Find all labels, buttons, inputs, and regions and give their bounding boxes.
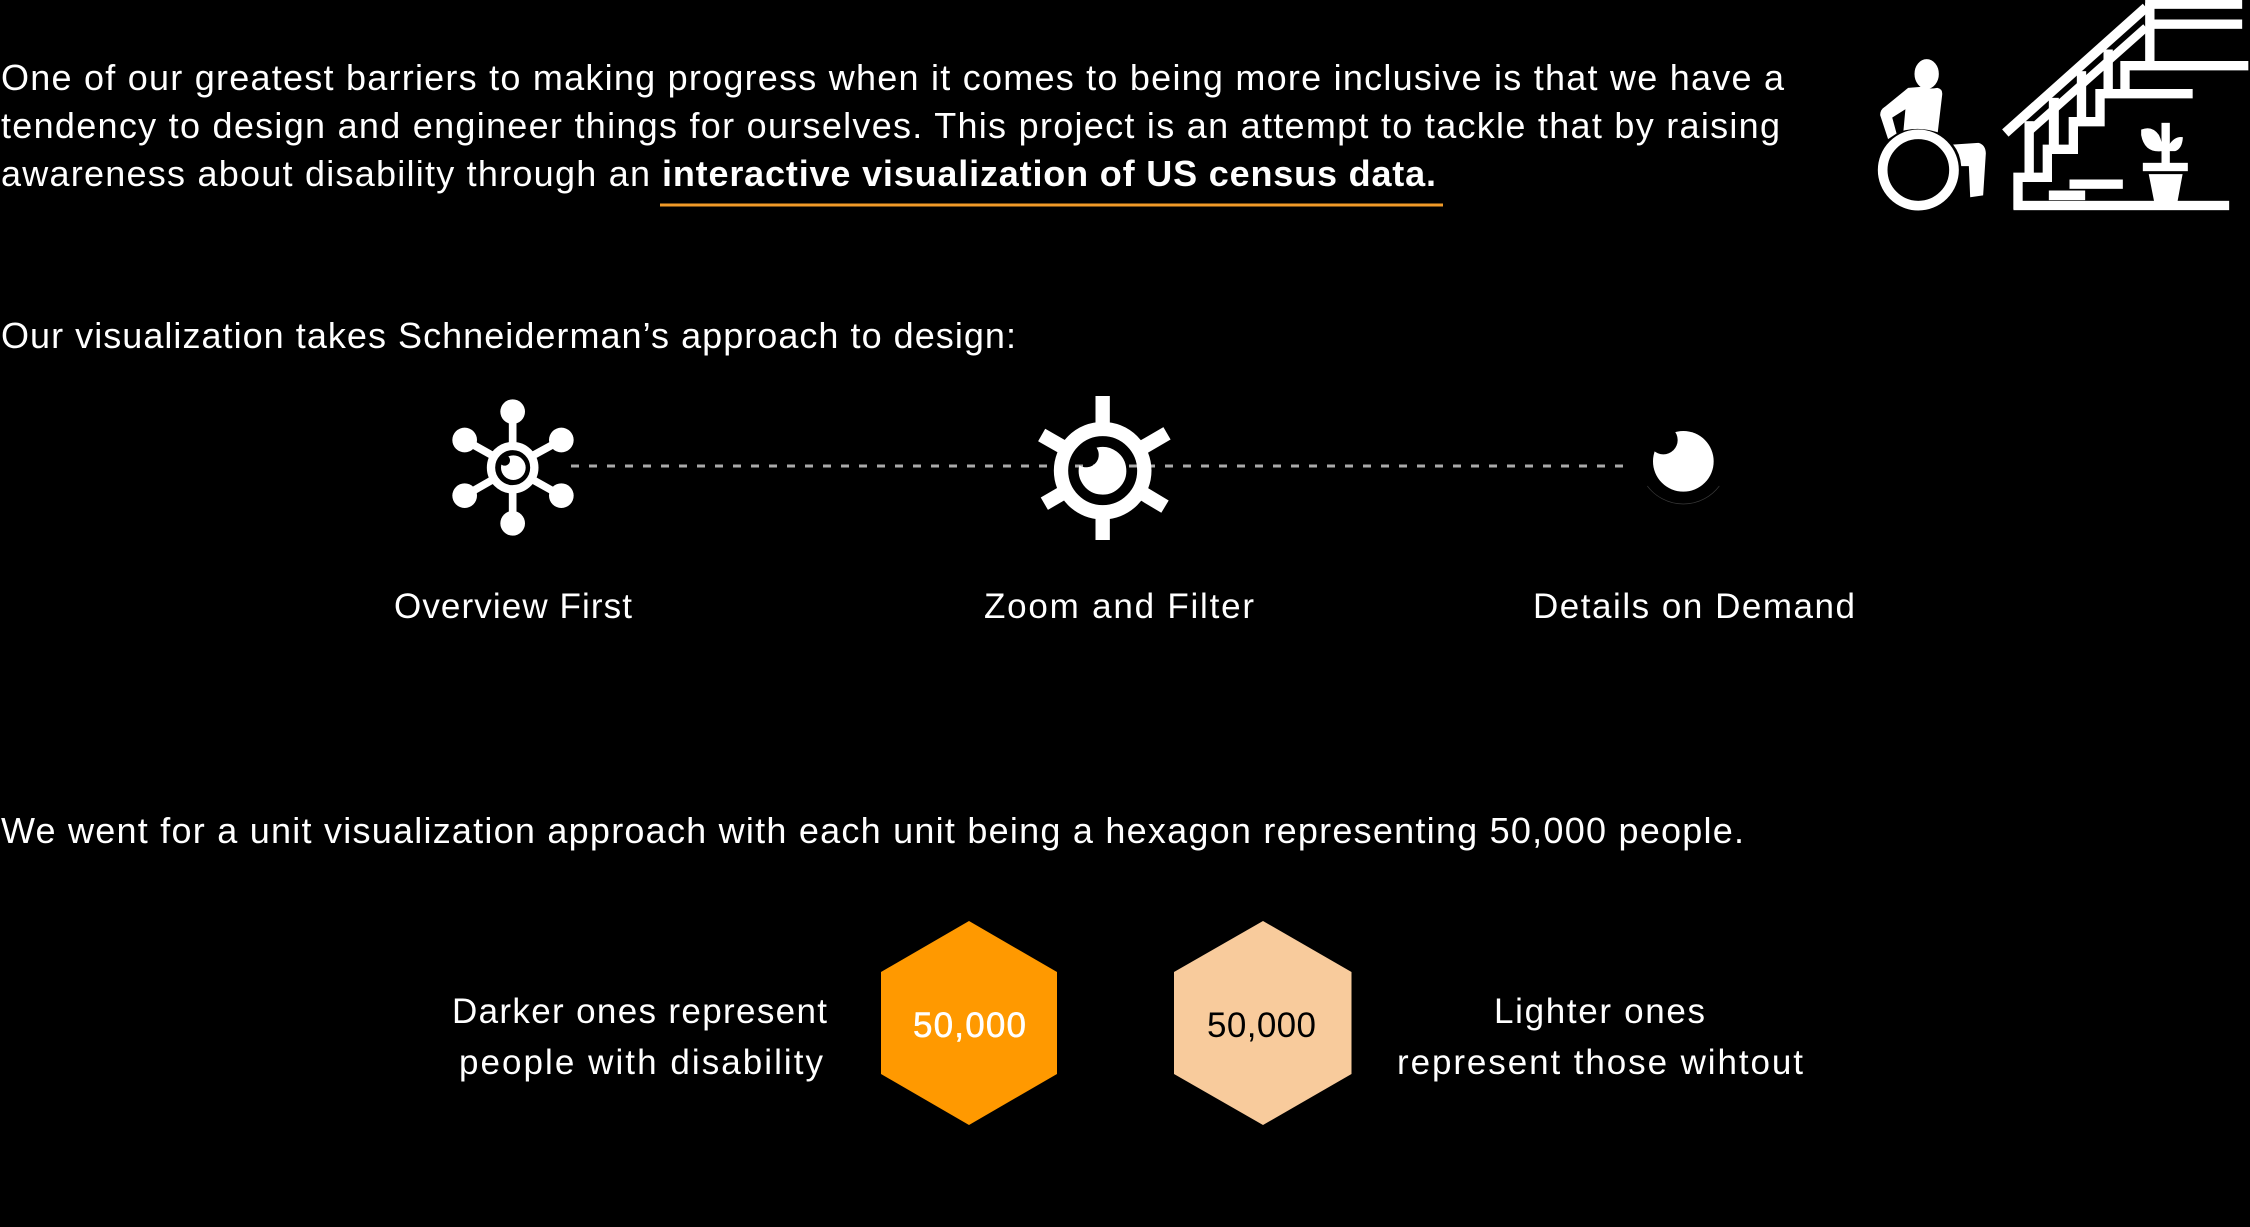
icon: wheelchair user and stairs: [1881, 0, 2248, 210]
icon: overview network eye: [452, 399, 574, 536]
hexagon: lighter unit: [1174, 921, 1352, 1125]
hexagon: darker unit: 50,000: [913, 1006, 1026, 1045]
step labels: [394, 587, 1855, 626]
hexagon: lighter unit: 50,000: [1207, 1006, 1316, 1045]
legend text: lighter: represent those wihtout: [1397, 1043, 1803, 1082]
second heading text: Our visualization takes Schneiderman’s approach to design:: [1, 315, 1016, 356]
hexagon: darker unit: [881, 921, 1057, 1125]
legend text: darker: people with disability: [459, 1043, 824, 1082]
intro text block: awareness about disability through an: [1, 153, 650, 194]
step labels: Overview First: [394, 587, 632, 626]
legend text: lighter: Lighter ones: [1494, 992, 1705, 1031]
legend text: darker: [452, 992, 827, 1082]
icon: details eye: [1647, 426, 1719, 504]
third heading text: We went for a unit visualization approach with each unit being a hexagon representing 50,000 people.: [1, 810, 1744, 851]
intro text block: interactive visualization of US census data.: [662, 153, 1436, 194]
intro text block: One of our greatest barriers to making progress when it comes to being more inclusive is that we have a: [1, 57, 1785, 98]
dashed connector: [571, 464, 1626, 468]
legend text: lighter: [1397, 992, 1803, 1082]
orange underline: [660, 204, 1443, 206]
icon: zoom gear eye: [1042, 396, 1167, 540]
intro text block: tendency to design and engineer things for ourselves. This project is an attempt to tackle that by raising: [1, 105, 1780, 146]
intro text block: [1, 57, 1785, 194]
step labels: Details on Demand: [1533, 587, 1855, 626]
step labels: Zoom and Filter: [984, 587, 1254, 626]
legend text: darker: Darker ones represent: [452, 992, 827, 1031]
